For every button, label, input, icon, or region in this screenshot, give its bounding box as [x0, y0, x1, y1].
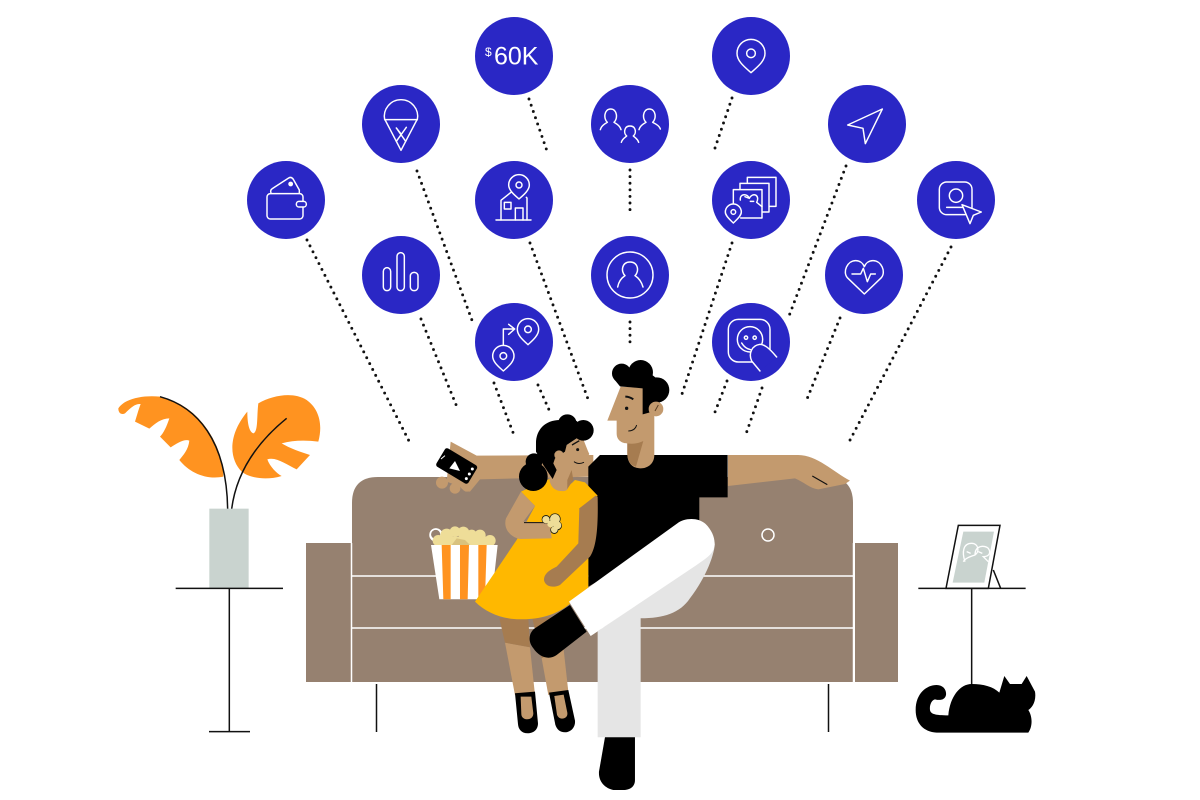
ear — [554, 450, 564, 460]
frame — [946, 525, 1000, 588]
cushion seams — [352, 543, 854, 682]
girl far arm — [505, 492, 552, 539]
father torso — [588, 455, 728, 587]
girl legs — [499, 617, 568, 695]
photo — [953, 532, 994, 583]
cat — [916, 676, 1035, 733]
icon: route between pins — [475, 303, 553, 381]
father right arm — [728, 455, 850, 489]
icon: house with pin — [475, 161, 553, 239]
father crossed thigh — [569, 519, 715, 636]
popcorn in hand — [542, 513, 562, 534]
bun — [519, 453, 548, 491]
icon: photo gallery with pin — [712, 161, 790, 239]
icon: income figure: 60K — [494, 42, 539, 70]
leaf left — [118, 396, 223, 478]
sofa buttons — [762, 529, 774, 541]
sofa back — [352, 477, 853, 682]
icon: smiley with tapping finger — [712, 303, 790, 381]
father crossed foot — [530, 605, 587, 658]
icon: navigation arrow — [828, 85, 906, 163]
ear — [649, 402, 663, 416]
easel — [993, 570, 1001, 588]
bucket stripes — [442, 545, 487, 599]
icon: heart with pulse — [825, 236, 903, 314]
icon: income figure: $ — [485, 45, 492, 59]
popcorn — [433, 526, 496, 546]
side table — [176, 588, 283, 732]
sofa legs — [376, 684, 828, 732]
eye and brow — [625, 407, 628, 410]
bucket body — [431, 545, 498, 599]
table — [918, 588, 1026, 685]
popcorn shading — [452, 538, 470, 545]
sofa — [306, 477, 898, 732]
icon: profile search cursor — [917, 161, 995, 239]
eye and brow — [576, 448, 579, 451]
girl near arm — [544, 496, 598, 587]
faces in photo — [963, 543, 990, 562]
girl hair — [536, 414, 594, 479]
father left arm and hand — [436, 442, 593, 494]
smile — [628, 425, 637, 431]
face and neck — [607, 387, 654, 468]
father and daughter — [430, 360, 850, 790]
icon: location pin — [712, 17, 790, 95]
plant on side table — [118, 395, 320, 732]
icon: user profile — [591, 236, 669, 314]
icon: bar chart — [362, 236, 440, 314]
icon: ice cream cone — [362, 85, 440, 163]
sofa arm left — [306, 543, 351, 682]
father foot on floor — [599, 737, 635, 790]
girl dress — [475, 479, 598, 619]
father hair — [612, 360, 669, 414]
left button — [430, 529, 442, 541]
leaf right — [232, 395, 320, 478]
icon: income figure — [475, 17, 553, 95]
neck shadow — [567, 470, 573, 489]
white button behind popcorn — [430, 529, 441, 540]
vase — [209, 509, 249, 588]
stems — [160, 397, 287, 509]
icon: group of people — [591, 85, 669, 163]
girl head — [519, 414, 594, 491]
popcorn bucket — [430, 526, 498, 599]
girl shoes — [515, 690, 575, 733]
dotted connector lines — [307, 98, 951, 443]
father lower leg — [591, 542, 715, 737]
sofa arm right — [855, 543, 898, 682]
icon: wallet — [247, 161, 325, 239]
smile — [574, 462, 584, 464]
picture frame and side table — [916, 525, 1035, 733]
father head and neck — [607, 360, 669, 468]
neck shadow — [627, 441, 643, 467]
phone — [435, 447, 478, 485]
neck and face — [549, 435, 589, 491]
